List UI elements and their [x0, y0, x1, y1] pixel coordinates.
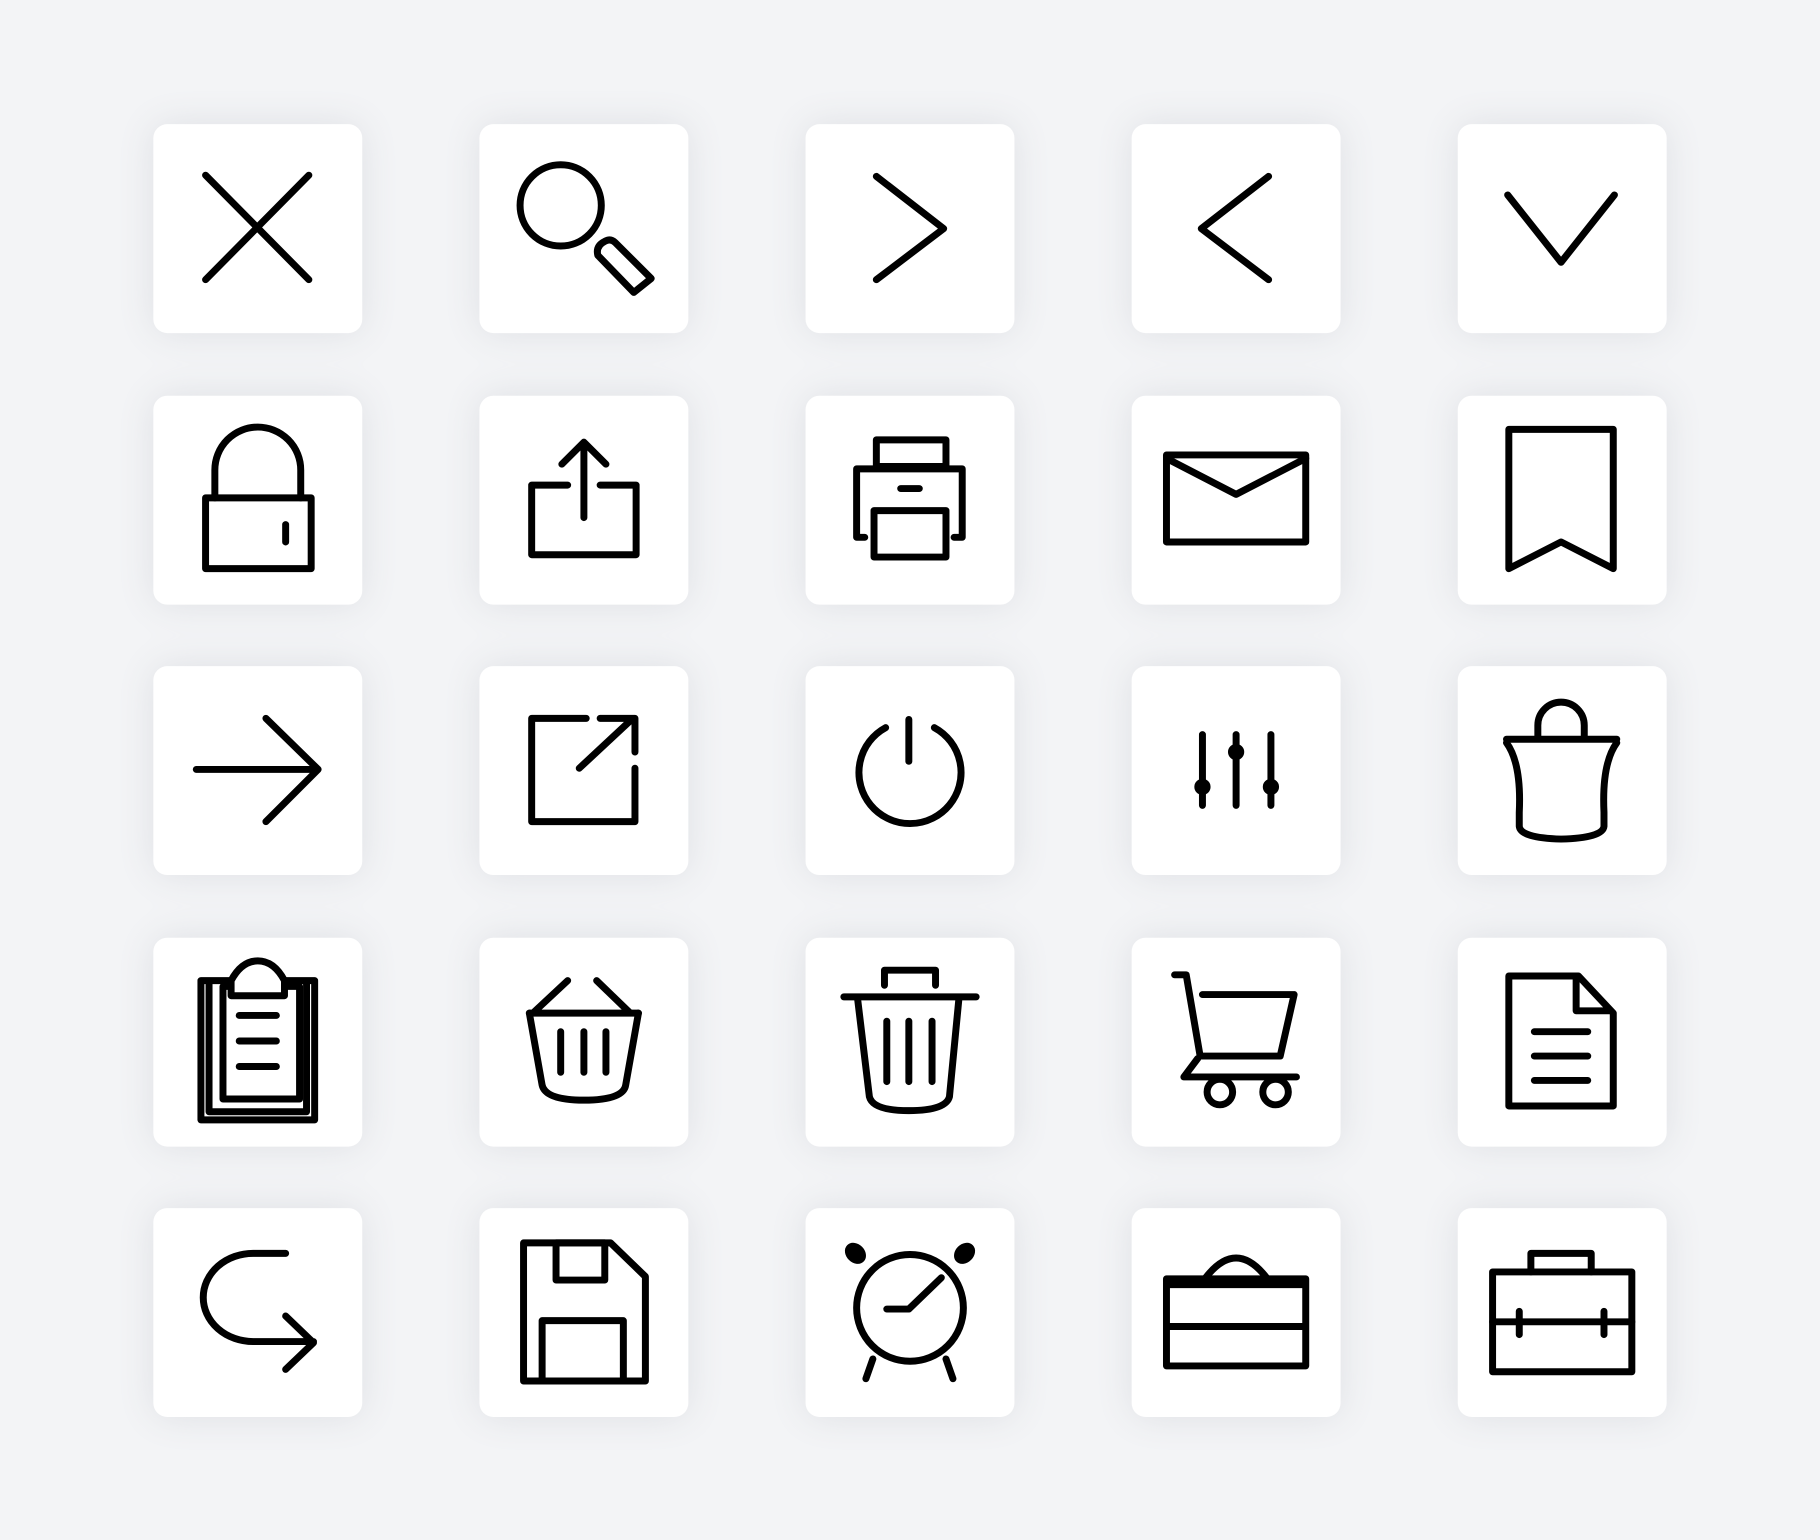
icon: bookmark	[1509, 429, 1613, 569]
icon: arrow right	[196, 718, 318, 822]
icon: chevron left	[1201, 176, 1269, 280]
icon: redo	[203, 1253, 313, 1369]
icon: mail	[1166, 455, 1306, 542]
icon: close	[206, 175, 309, 280]
icon: document	[1509, 976, 1613, 1106]
icon: bag	[1507, 702, 1617, 839]
icon: external link	[532, 718, 635, 822]
icon: chevron right	[876, 176, 944, 280]
icon: toolbox	[1493, 1253, 1632, 1372]
icon: briefcase	[1166, 1258, 1306, 1366]
icon: search	[520, 165, 651, 292]
icon: trash	[844, 970, 976, 1111]
icon: lock	[206, 427, 311, 569]
icon: clipboard	[201, 961, 315, 1120]
icon: save	[524, 1243, 645, 1381]
icon: chevron down	[1508, 195, 1614, 262]
icon: printer	[857, 440, 962, 557]
icon: sliders	[1198, 735, 1276, 805]
icon: basket	[529, 981, 638, 1100]
icon: cart	[1175, 975, 1296, 1105]
icon: share	[532, 442, 636, 555]
icon: power	[859, 720, 961, 824]
icon: alarm clock	[846, 1244, 974, 1379]
